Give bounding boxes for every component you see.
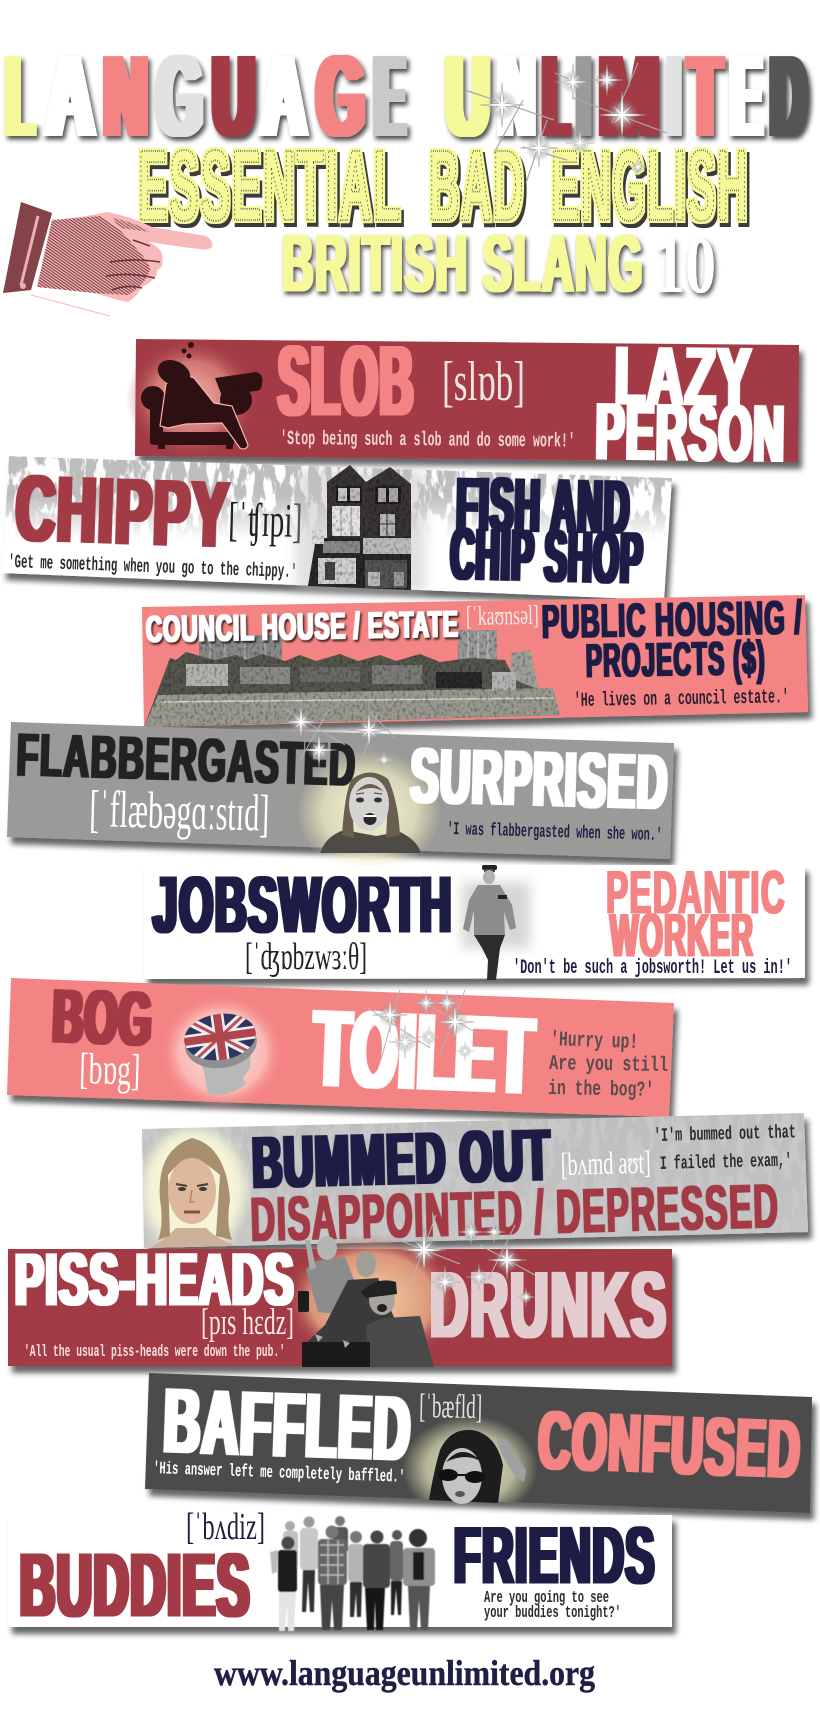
title: Language Unlimited: G (157, 31, 202, 161)
panel: council house: COUNCIL HOUSE / ESTATE (145, 604, 459, 650)
panel: bummed out: BUMMED OUT (251, 1115, 552, 1204)
heading: British Slang 10: 10 (654, 222, 716, 310)
panel: flabbergasted: [ˈflæbəgɑːstɪd] (89, 781, 270, 843)
title: Language Unlimited: L (544, 31, 568, 161)
sparkles: drunks cluster (386, 1215, 536, 1307)
panel: bog: in the bog?' (548, 1078, 654, 1103)
title: Language Unlimited: I (669, 31, 679, 161)
panel: baffled: 'His answer left me completely baffled.' (153, 1459, 405, 1488)
panel: jobsworth: JOBSWORTH (153, 860, 453, 949)
photo: chip shop building (296, 465, 426, 592)
panel: jobsworth: [ˈʤɒbzwɜːθ] (245, 936, 367, 978)
sparkles: toilet cluster (366, 990, 480, 1061)
panel: buddies: [ˈbʌdiz] (186, 1506, 265, 1548)
photo: council estate (144, 630, 560, 727)
title: Language Unlimited: E (375, 31, 404, 161)
sparkles: title cluster (465, 63, 667, 183)
panel: piss-heads: [pɪs hɛdz] (201, 1302, 294, 1343)
panel: jobsworth (144, 859, 805, 980)
heading: Essential Bad English: ESSENTIAL (140, 134, 404, 246)
title: Language Unlimited: A (261, 31, 306, 161)
heading: Essential Bad English: BAD (429, 130, 525, 242)
sparkles: flabbergasted cluster (283, 704, 395, 770)
title: Language Unlimited: U (213, 31, 254, 161)
panel: piss-heads: PISS-HEADS (15, 1238, 295, 1321)
panel: buddies: Are you going to see (484, 1589, 609, 1608)
title: Language Unlimited (7, 31, 806, 161)
panel: flabbergasted: 'I was flabbergasted when she won.' (447, 820, 662, 846)
photo: uniformed soldier (462, 865, 530, 980)
title: Language Unlimited: I (578, 31, 589, 161)
heading: Essential Bad English: BAD (432, 134, 528, 246)
panel: slob: 'Stop being such a slob and do some work!' (280, 428, 575, 454)
photo: frowning woman (142, 1128, 246, 1252)
panel: baffled (145, 1370, 812, 1520)
photo: surprised woman (320, 772, 421, 853)
icon: man slouching on sofa (141, 342, 262, 449)
panel: piss-heads: 'All the usual piss-heads were down the pub.' (24, 1343, 285, 1362)
panel: chippy: 'Get me something when you go to the chippy.' (8, 551, 297, 583)
heading: Essential Bad English: ESSENTIAL (138, 130, 402, 242)
title: Language Unlimited: E (731, 31, 761, 161)
title: Language Unlimited: N (499, 31, 534, 161)
panel: bummed out: [bʌmd aʊt] (560, 1144, 651, 1182)
panel: flabbergasted (7, 721, 674, 874)
title: Language Unlimited: G (317, 31, 364, 161)
panel: flabbergasted: FLABBERGASTED (16, 721, 358, 799)
panel: council house: [ˈkaʊnsəl] (466, 600, 539, 631)
panel: bog: [bɒg] (79, 1044, 141, 1095)
photo: confused woman in sunglasses (429, 1430, 526, 1504)
panel: bummed out (142, 1113, 808, 1255)
title: Language Unlimited: A (46, 31, 94, 161)
panel: buddies (8, 1506, 672, 1636)
title: Language Unlimited: T (689, 31, 721, 161)
panel: slob: SLOB (278, 325, 415, 436)
panel: buddies: your buddies tonight?' (484, 1604, 621, 1623)
panel: bog (7, 974, 674, 1117)
title: Language Unlimited: N (104, 31, 147, 161)
title: Language Unlimited: L (7, 31, 33, 161)
panel: bog: 'Hurry up! (550, 1029, 639, 1055)
panel: piss-heads (8, 1234, 672, 1367)
panel: chippy: CHIPPY (14, 455, 232, 567)
photo: group of friends (270, 1516, 435, 1631)
panel: bog: BOG (51, 974, 155, 1063)
panel: slob: [slɒb] (442, 351, 525, 413)
panel: buddies: BUDDIES (20, 1536, 251, 1636)
panel: baffled: BAFFLED (162, 1370, 414, 1481)
panel: council house (142, 590, 808, 727)
panel: baffled: [ˈbæfld] (419, 1388, 482, 1426)
icon: union jack toilet (184, 1014, 257, 1095)
heading: Essential Bad English: ESSENTIAL (138, 130, 402, 242)
icon: pointing hand (3, 202, 212, 316)
footer: website url: www.languageunlimited.org (214, 1653, 595, 1693)
panel: bog: TOILET (312, 987, 538, 1117)
panel: chippy: [ˈʧɪpi] (228, 493, 303, 548)
panel: chippy (2, 455, 672, 600)
heading: Essential Bad English: BAD (429, 130, 525, 242)
panel: bog: Are you still (549, 1053, 668, 1078)
title: Language Unlimited: U (446, 31, 489, 161)
photo: three drunk men (298, 1236, 434, 1367)
title: Language Unlimited: M (599, 31, 659, 161)
panel: slob (126, 325, 799, 480)
